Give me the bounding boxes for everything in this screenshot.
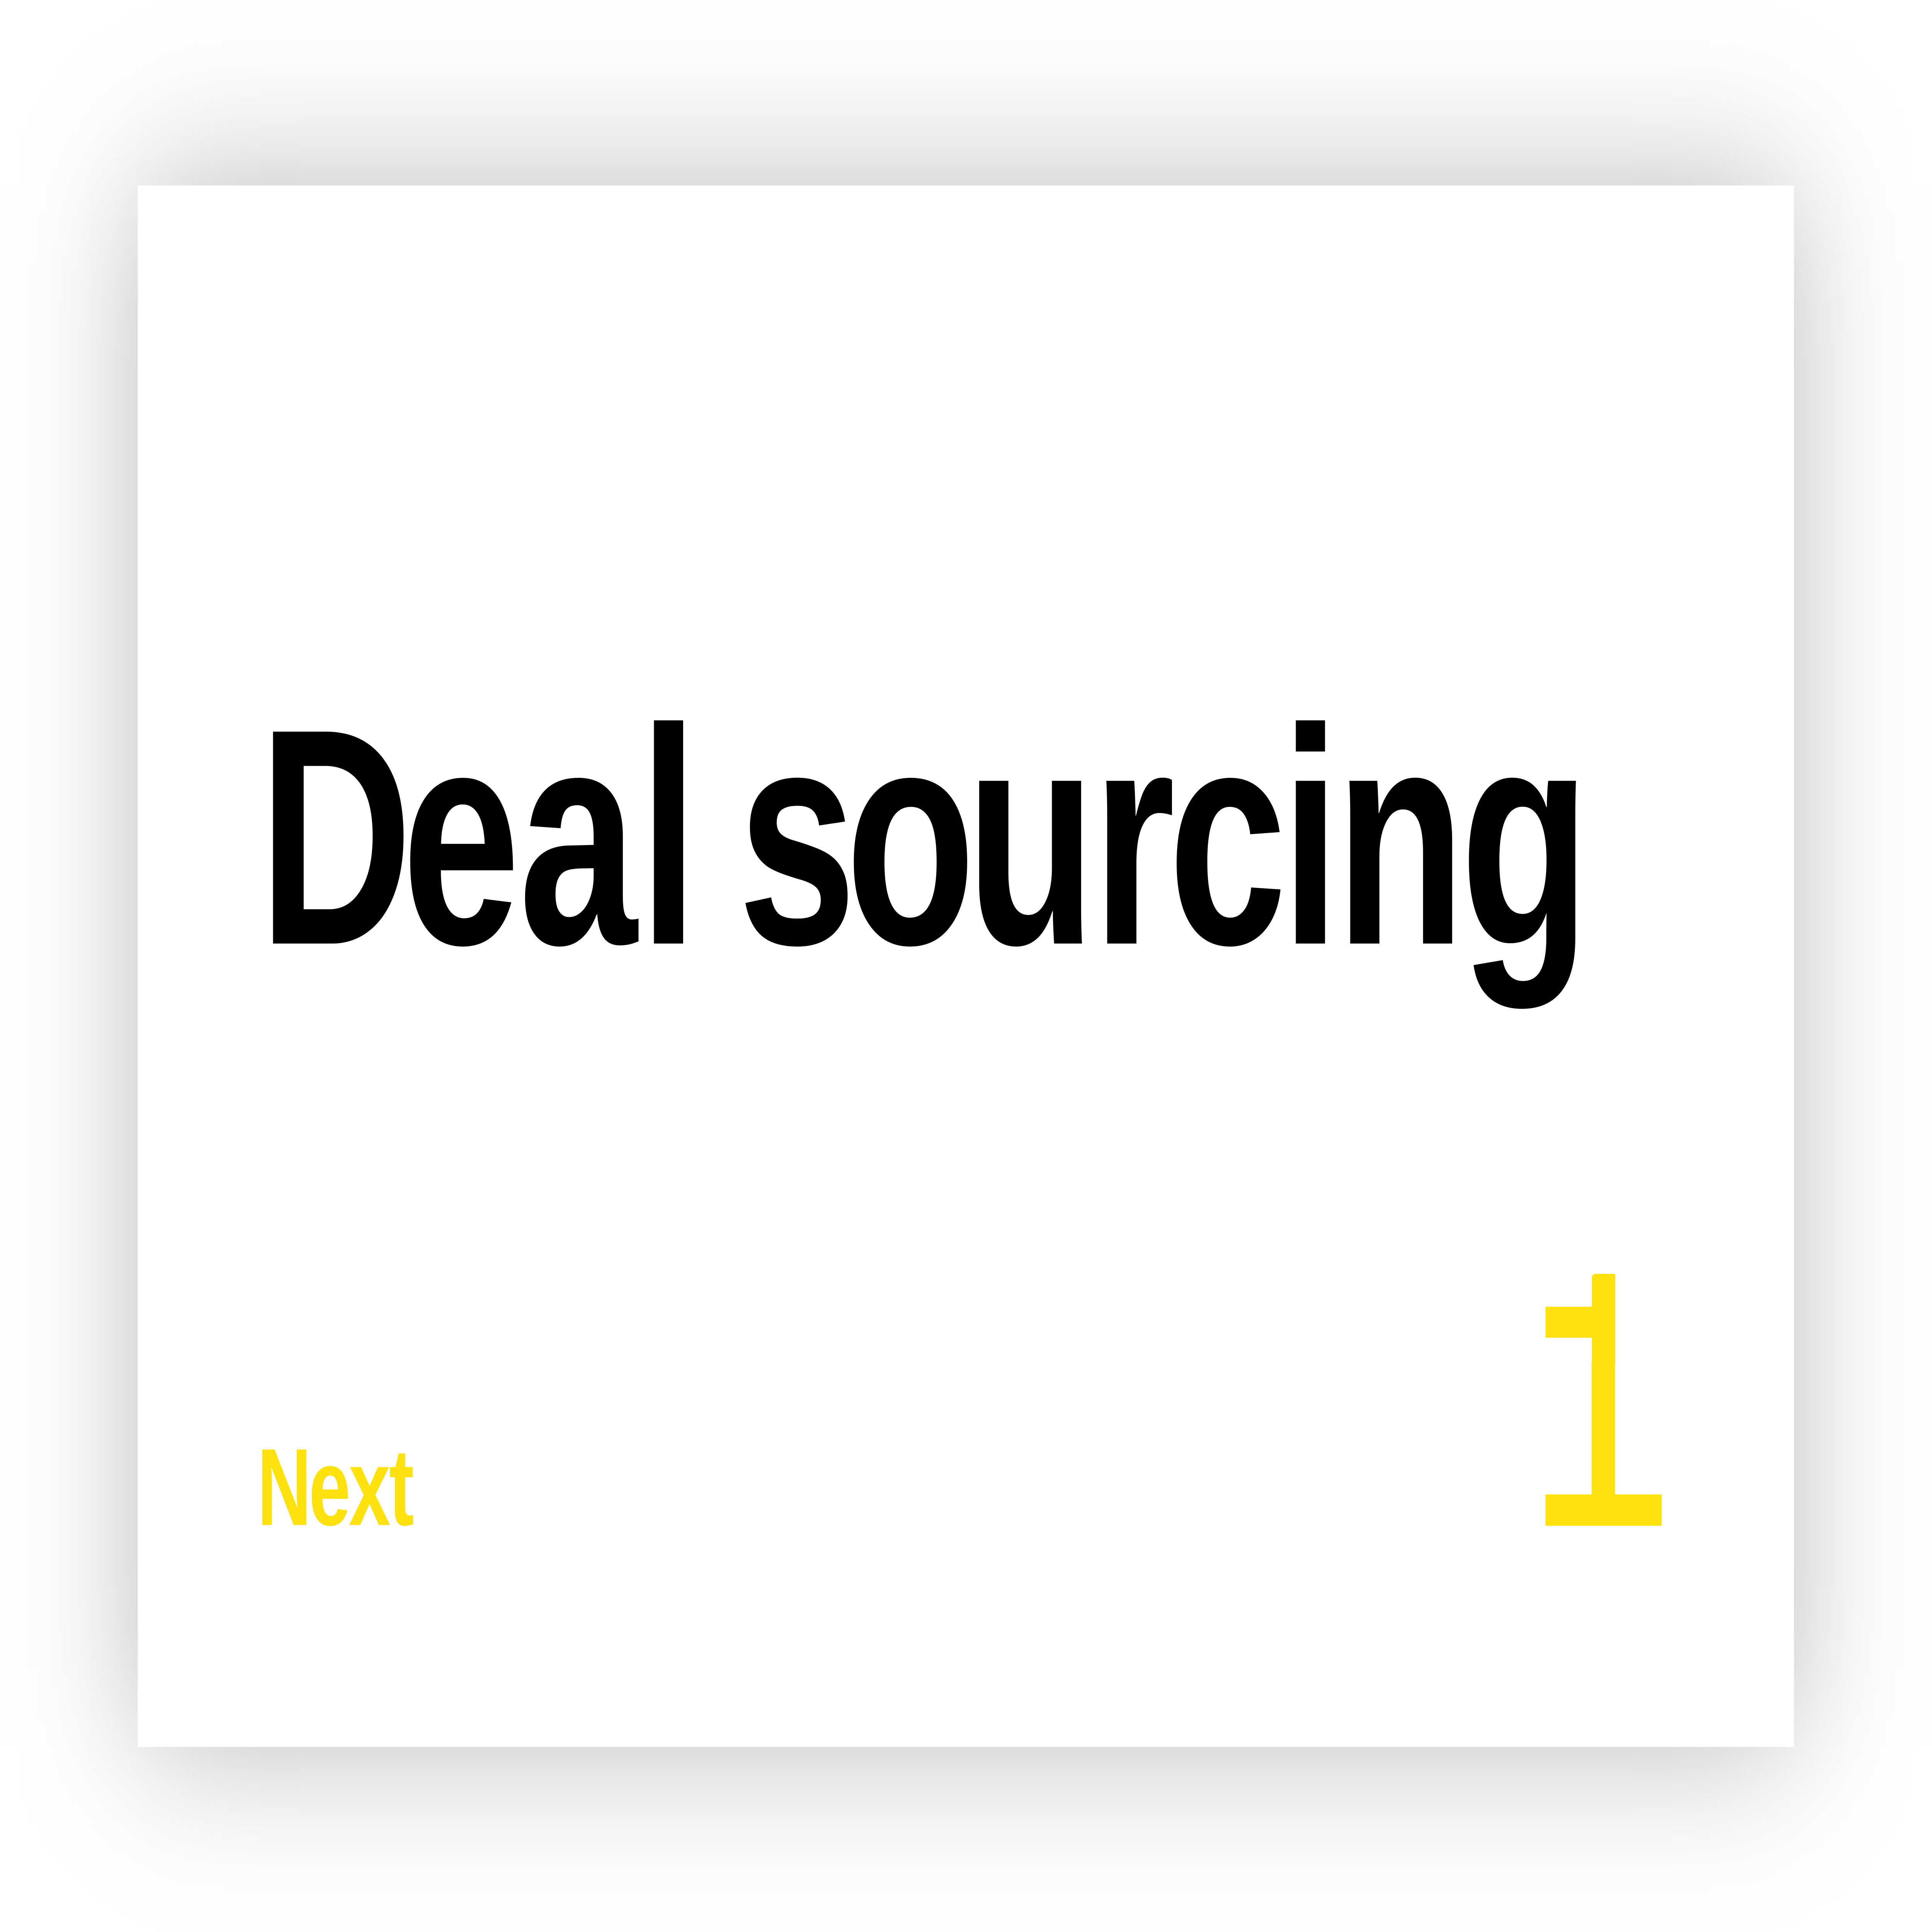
label: Next: Next [257,1426,414,1548]
step number: 1: 1 [1524,1210,1667,1637]
title: Deal sourcing: Deal sourcing [259,665,1590,1011]
panel: white card [138,185,1794,1747]
